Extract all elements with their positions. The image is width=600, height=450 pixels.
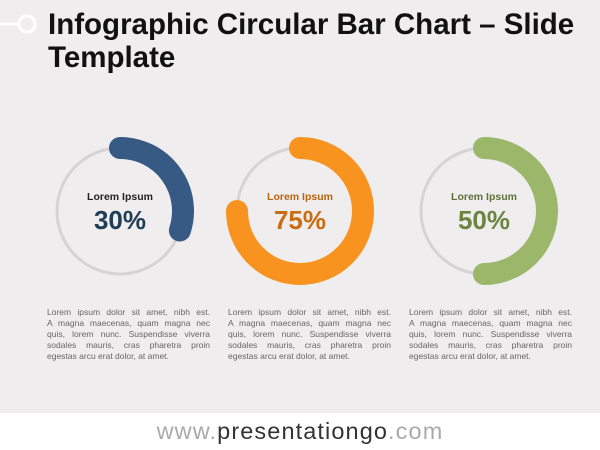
icon: title connector	[0, 14, 36, 34]
text block 3: egestas arcu erat dolor, at amet.	[409, 351, 531, 361]
text block 3: Lorem ipsum dolor sit amet, nibh est.	[409, 307, 572, 317]
text block 1: egestas arcu erat dolor, at amet.	[47, 351, 169, 361]
text block 3: sodales mauris, cras pharetra proin	[409, 340, 572, 350]
chart 3: 50%: Lorem Ipsum	[451, 191, 517, 203]
text block 2: Lorem ipsum dolor sit amet, nibh est.	[228, 307, 391, 317]
text block 2: A magna maecenas, quam magna nec	[228, 318, 391, 328]
chart 3: 50%	[421, 148, 547, 274]
text block 2: quis, lorem nunc. Suspendisse viverra	[228, 329, 391, 339]
footer: www.presentationgo.com	[157, 418, 443, 444]
text block 1: sodales mauris, cras pharetra proin	[47, 340, 210, 350]
chart 1: 30%: 30%	[94, 205, 146, 235]
chart 3: 50%: 50%	[458, 205, 510, 235]
text block 2: egestas arcu erat dolor, at amet.	[228, 351, 350, 361]
text block 1	[47, 307, 210, 361]
text block 3: A magna maecenas, quam magna nec	[409, 318, 572, 328]
footer	[0, 413, 600, 450]
text block 2: sodales mauris, cras pharetra proin	[228, 340, 391, 350]
chart 1: 30%	[57, 148, 183, 274]
text block 1: Lorem ipsum dolor sit amet, nibh est.	[47, 307, 210, 317]
chart: circular bars	[56, 137, 558, 285]
text block 3	[409, 307, 572, 361]
chart 2: 75%: Lorem Ipsum	[267, 191, 333, 203]
text block 2	[228, 307, 391, 361]
chart 1: 30%: Lorem Ipsum	[87, 191, 153, 203]
text block 3: quis, lorem nunc. Suspendisse viverra	[409, 329, 572, 339]
text block 1: quis, lorem nunc. Suspendisse viverra	[47, 329, 210, 339]
title	[48, 8, 574, 74]
text block 1: A magna maecenas, quam magna nec	[47, 318, 210, 328]
chart 2: 75%	[237, 148, 363, 274]
chart 2: 75%: 75%	[274, 205, 326, 235]
title: Template	[48, 41, 175, 74]
title: Infographic Circular Bar Chart – Slide	[48, 8, 574, 41]
